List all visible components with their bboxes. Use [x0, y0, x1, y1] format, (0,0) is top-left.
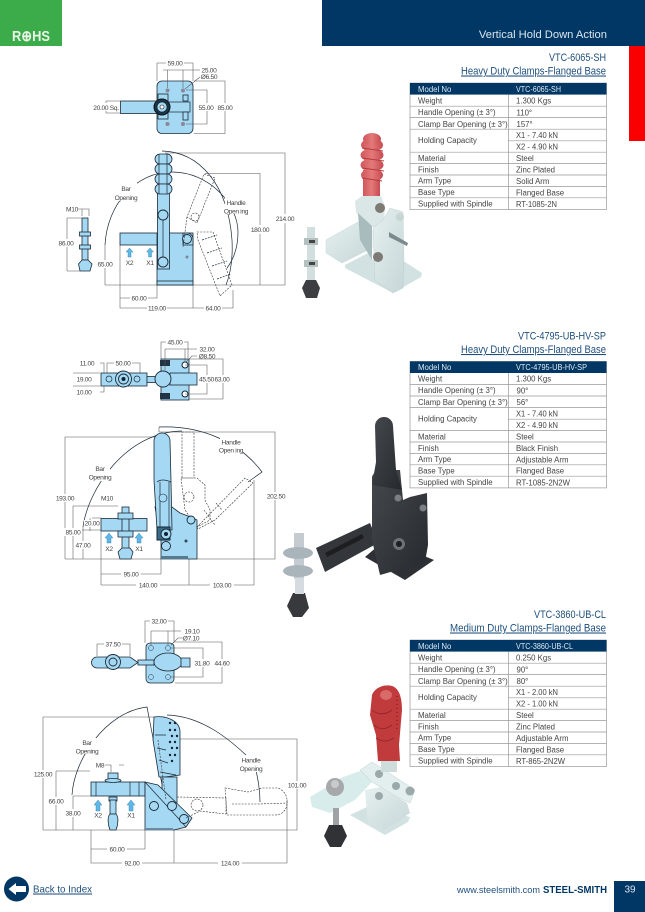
product 3 side-view dimension drawing: 101.00: [288, 782, 307, 790]
product 1 side-view dimension drawing: Handle: [226, 200, 246, 207]
product 3 side-view dimension drawing: 92.00: [124, 860, 140, 868]
product 3 side-view dimension drawing: 125.00: [34, 772, 53, 778]
product 2 top-view dimension drawing: 63.00: [214, 376, 230, 384]
product 3 side-view dimension drawing: Handle: [241, 758, 261, 764]
product 1 top-view dimension drawing: 25.00: [201, 68, 217, 74]
product 3 top-view dimension drawing: 32.00: [151, 618, 167, 626]
product 2 side-view dimension drawing: M10: [101, 496, 114, 502]
product 3 spec table: 0.250 Kgs: [516, 653, 551, 662]
footer: website and brand: www.steelsmith.com: [456, 885, 540, 896]
product 2 side-view dimension drawing: X1: [135, 546, 143, 553]
product 2 spec table: Handle Opening (± 3°): [418, 386, 496, 395]
product 1 spec table: Steel: [516, 154, 534, 163]
product 3 spec table: Weight: [418, 653, 443, 662]
product 2 spec table: Clamp Bar Opening (± 3°): [418, 398, 508, 407]
product 1 spec table: Supplied with Spindle: [418, 200, 493, 208]
product 2 side-view dimension drawing: X2: [105, 546, 113, 553]
product 1 side-view dimension drawing: [57, 151, 295, 312]
product 1 spec table: Material: [418, 154, 446, 163]
product 3 side-view dimension drawing: M8: [96, 762, 105, 770]
product 3 spec table: 80°: [516, 677, 528, 686]
product 2 spec table: RT-1085-2N2W: [516, 478, 571, 487]
product 2 top-view dimension drawing: Ø8.50: [199, 354, 216, 360]
product 3 spec table: Arm Type: [418, 734, 451, 742]
product 2 spec table: 1.300 Kgs: [516, 375, 551, 384]
product 2 side-view dimension drawing: 85.00: [65, 530, 81, 536]
product 2 spec table: [410, 361, 606, 488]
product 2 top-view dimension drawing: 11.00: [80, 360, 95, 368]
product 2 top-view dimension drawing: 50.00: [115, 360, 131, 368]
product 1 side-view dimension drawing: M10: [66, 206, 79, 214]
product 1 spec table: Handle Opening (± 3°): [418, 108, 496, 117]
product 2 spec table: Holding Capacity: [418, 414, 477, 423]
product 1 spec table: [410, 83, 606, 210]
product 1 top-view dimension drawing: 20.00 Sq.: [93, 105, 119, 112]
product 3 spec table: X1 - 2.00 kN: [516, 688, 558, 697]
product 3 heading: [450, 609, 606, 634]
header: title banner: Vertical Hold Down Action: [479, 29, 607, 41]
header: RoHS badge: [0, 0, 62, 46]
product 1 top-view dimension drawing: 59.00: [167, 60, 183, 68]
product 3 spec table: Handle Opening (± 3°): [418, 665, 496, 674]
product 2 spec table: X2 - 4.90 kN: [516, 421, 558, 430]
footer: page number: [614, 881, 645, 912]
product 1 spec table: Solid Arm: [516, 177, 549, 186]
product 1 spec table: Model No: [418, 85, 452, 94]
side tab: red: [629, 46, 645, 141]
product 3 side-view dimension drawing: Opening: [240, 766, 263, 773]
product 2 spec table: Arm Type: [418, 455, 451, 464]
product 3 spec table: Clamp Bar Opening (± 3°): [418, 677, 508, 686]
product 1 side-view dimension drawing: 119.00: [148, 306, 167, 312]
product 2 clamp photo: black finish: [283, 417, 434, 617]
product 1 spec table: Clamp Bar Opening (± 3°): [418, 120, 508, 129]
product 2 top-view dimension drawing: 19.00: [76, 376, 92, 384]
product 1 spec table: 157°: [516, 120, 533, 129]
product 1 top-view dimension drawing: Ø6.50: [201, 74, 218, 81]
product 1 top-view dimension drawing: 85.00: [217, 105, 233, 112]
product 1 spec table: VTC-6065-SH: [516, 85, 561, 94]
product 1 spec table: Base Type: [418, 188, 455, 197]
footer: website and brand: STEEL-SMITH: [543, 884, 607, 896]
product 3 heading: VTC-3860-UB-CL: [534, 609, 606, 621]
product 3 spec table: VTC-3860-UB-CL: [516, 642, 574, 651]
product 2 side-view dimension drawing: Handle: [221, 440, 241, 446]
product 3 spec table: Supplied with Spindle: [418, 756, 493, 766]
product 2 spec table: Steel: [516, 432, 534, 441]
product 1 side-view dimension drawing: Opening: [115, 195, 138, 202]
product 2 top-view dimension drawing: 45.50: [199, 376, 215, 384]
product 3 spec table: Adjustable Arm: [516, 734, 568, 743]
product 1 spec table: Zinc Plated: [516, 166, 555, 174]
product 1 side-view dimension drawing: 64.00: [205, 306, 221, 312]
footer: back to index link: [4, 876, 93, 902]
product 1 side-view dimension drawing: 214.00: [276, 216, 295, 223]
product 3 top-view dimension drawing: 44.60: [214, 660, 230, 668]
product 1 spec table: X2 - 4.90 kN: [516, 142, 558, 152]
header: RoHS badge: R⊕HS: [12, 28, 50, 45]
product 3 side-view dimension drawing: 38.00: [65, 810, 81, 818]
product 3 spec table: Steel: [516, 711, 534, 720]
footer: page number: 39: [624, 884, 636, 896]
product 2 top-view dimension drawing: 10.00: [76, 390, 92, 396]
product 1 side-view dimension drawing: Open ing: [224, 208, 249, 216]
product 2 spec table: Supplied with Spindle: [418, 478, 493, 487]
product 1 clamp photo: red grip, zinc body: [302, 133, 422, 298]
product 1 side-view dimension drawing: 86.00: [58, 240, 74, 248]
product 2 spec table: Material: [418, 432, 446, 441]
product 1 side-view dimension drawing: X1: [146, 260, 154, 267]
product 1 spec table: Arm Type: [418, 176, 451, 186]
product 3 top-view dimension drawing: Ø7.10: [183, 636, 200, 642]
product 3 side-view dimension drawing: 124.00: [221, 860, 240, 868]
product 2 side-view dimension drawing: 193.00: [56, 496, 75, 502]
product 3 heading: Medium Duty Clamps-Flanged Base: [450, 622, 606, 634]
product 2 side-view dimension drawing: 140.00: [139, 582, 158, 590]
product 2 spec table: Black Finish: [516, 444, 558, 453]
product 1 heading: VTC-6065-SH: [549, 52, 606, 64]
product 1 top-view dimension drawing: 55.00: [198, 105, 214, 112]
product 3 top-view dimension drawing: 37.50: [105, 642, 121, 648]
product 1 spec table: Holding Capacity: [418, 136, 477, 145]
product 1 spec table: X1 - 7.40 kN: [516, 131, 558, 140]
product 1 heading: Heavy Duty Clamps-Flanged Base: [461, 66, 606, 78]
header: title banner: [322, 0, 645, 46]
product 2 top-view dimension drawing: 32.00: [199, 346, 215, 354]
product 1 top-view dimension drawing: [93, 59, 233, 134]
product 3 spec table: 90°: [516, 665, 528, 674]
product 2 spec table: Model No: [418, 363, 452, 372]
product 2 side-view dimension drawing: 47.00: [75, 542, 91, 550]
product 1 side-view dimension drawing: X2: [126, 260, 134, 267]
product 1 spec table: Finish: [418, 166, 439, 174]
product 2 side-view dimension drawing: Opening: [89, 474, 112, 482]
product 3 side-view dimension drawing: [34, 707, 307, 868]
product 3 top-view dimension drawing: 19.10: [184, 628, 200, 636]
product 2 side-view dimension drawing: 95.00: [123, 572, 139, 578]
product 3 spec table: Flanged Base: [516, 745, 564, 754]
product 2 spec table: Finish: [418, 444, 439, 453]
product 1 side-view dimension drawing: 65.00: [97, 262, 113, 268]
product 2 spec table: Weight: [418, 375, 443, 384]
product 3 clamp photo: red grip, zinc body: [310, 685, 415, 847]
product 2 side-view dimension drawing: Bar: [95, 466, 106, 473]
product 1 spec table: Weight: [418, 96, 443, 105]
product 3 side-view dimension drawing: Bar: [82, 740, 93, 747]
product 3 spec table: Model No: [418, 642, 452, 651]
product 1 side-view dimension drawing: 180.00: [251, 227, 270, 234]
product 3 spec table: Holding Capacity: [418, 693, 477, 702]
product 1 side-view dimension drawing: 60.00: [131, 296, 147, 302]
product 3 spec table: Base Type: [418, 745, 455, 754]
product 1 heading: [461, 52, 606, 78]
product 1 spec table: RT-1085-2N: [516, 200, 557, 209]
product 3 side-view dimension drawing: X1: [127, 812, 135, 820]
product 2 side-view dimension drawing: 202.50: [267, 494, 286, 500]
product 2 spec table: VTC-4795-UB-HV-SP: [516, 363, 587, 372]
product 2 spec table: Base Type: [418, 466, 455, 475]
product 3 side-view dimension drawing: X2: [94, 812, 102, 820]
product 1 side-view dimension drawing: Bar: [121, 186, 132, 193]
product 3 spec table: [410, 640, 606, 766]
product 3 top-view dimension drawing: [92, 617, 230, 683]
product 3 spec table: Material: [418, 711, 446, 720]
product 3 spec table: Finish: [418, 722, 439, 732]
product 2 side-view dimension drawing: 20.00: [84, 520, 100, 528]
footer: back to index link: Back to Index: [33, 884, 93, 896]
product 2 heading: Heavy Duty Clamps-Flanged Base: [461, 344, 606, 356]
footer: website and brand: [456, 884, 607, 896]
product 3 spec table: RT-865-2N2W: [516, 757, 566, 766]
product 3 top-view dimension drawing: 31.80: [194, 660, 210, 668]
product 2 heading: [461, 330, 606, 356]
product 2 top-view dimension drawing: [73, 338, 231, 400]
product 1 spec table: Flanged Base: [516, 188, 564, 197]
product 3 side-view dimension drawing: Opening: [76, 748, 99, 756]
product 2 spec table: 90°: [516, 387, 528, 396]
product 2 top-view dimension drawing: 45.00: [167, 340, 183, 346]
product 2 heading: VTC-4795-UB-HV-SP: [518, 330, 606, 342]
product 2 side-view dimension drawing: Open ing: [219, 448, 244, 454]
product 3 spec table: Zinc Plated: [516, 722, 555, 732]
product 3 spec table: X2 - 1.00 kN: [516, 700, 558, 708]
product 3 side-view dimension drawing: 66.00: [48, 798, 64, 806]
product 3 side-view dimension drawing: 60.00: [109, 846, 125, 854]
product 2 side-view dimension drawing: 103.00: [213, 582, 232, 590]
product 1 spec table: 110°: [516, 108, 532, 117]
product 2 spec table: Adjustable Arm: [516, 455, 568, 464]
product 2 spec table: Flanged Base: [516, 467, 564, 476]
product 2 side-view dimension drawing: [56, 427, 286, 590]
product 2 spec table: X1 - 7.40 kN: [516, 409, 558, 418]
product 2 spec table: 56°: [516, 398, 528, 407]
product 1 spec table: 1.300 Kgs: [516, 96, 551, 105]
